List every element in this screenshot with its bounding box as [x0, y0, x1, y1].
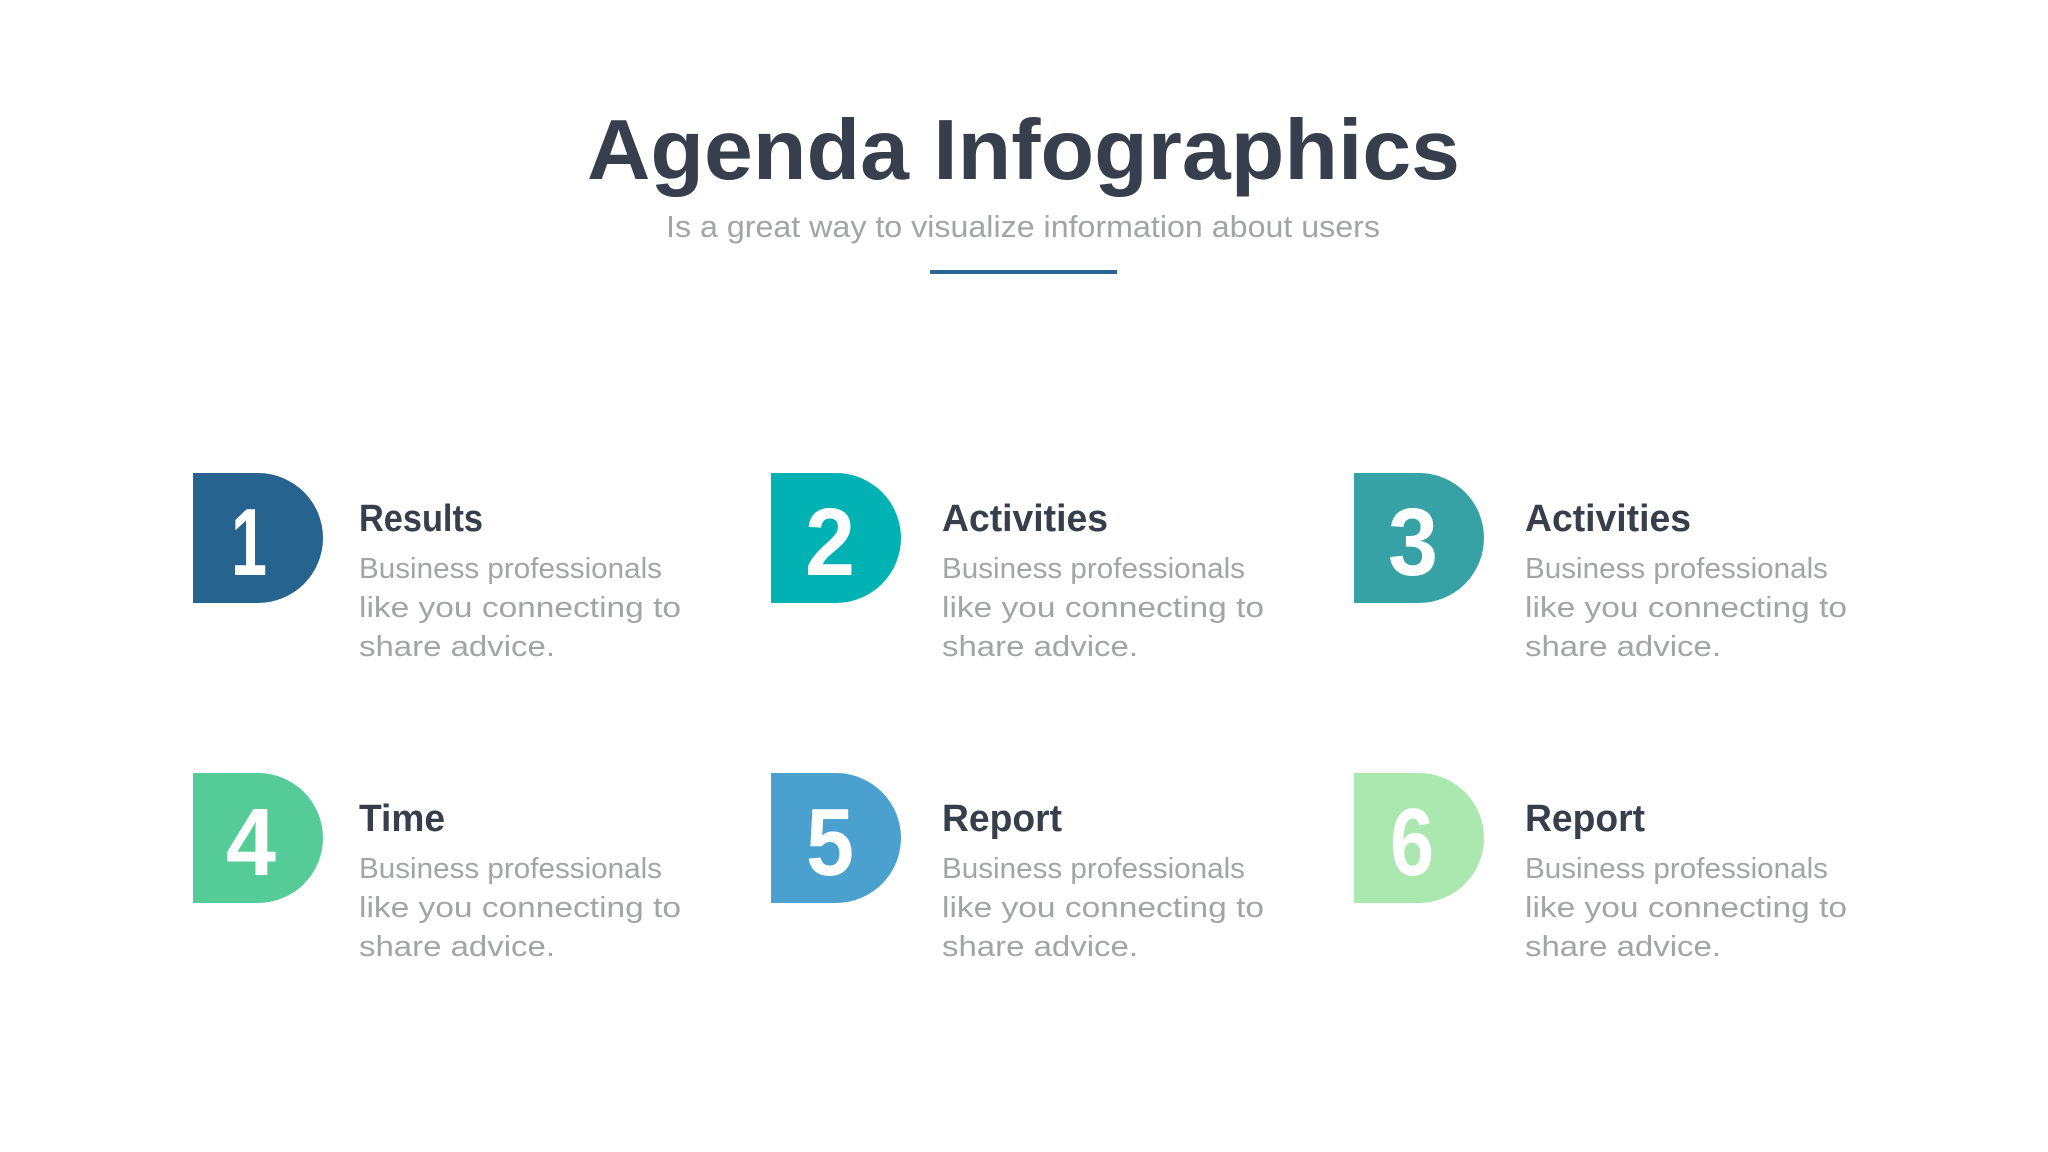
badge 6 — [1354, 773, 1484, 903]
description 2: share advice. — [942, 631, 1138, 663]
description 1: Business professionals — [359, 553, 662, 585]
badge 1: 1 — [231, 489, 267, 596]
badge 4 — [193, 773, 323, 903]
heading: Report: Report — [1525, 798, 1645, 840]
description 3: Business professionals — [1525, 553, 1828, 585]
agenda item 6: Report — [1354, 773, 1847, 963]
description 2: Business professionals — [942, 553, 1245, 585]
description 2: like you connecting to — [942, 592, 1264, 624]
badge 2: 2 — [805, 489, 855, 596]
badge 3: 3 — [1388, 489, 1438, 596]
heading: Activities: Activities — [1525, 498, 1691, 540]
title underline — [930, 270, 1117, 274]
heading: Activities: Activities — [942, 498, 1108, 540]
subtitle: Is a great way to visualize information about users — [666, 209, 1380, 244]
badge 3 — [1354, 473, 1484, 603]
agenda item 3: Activities — [1354, 473, 1847, 663]
description 3: like you connecting to — [1525, 592, 1847, 624]
badge 1 — [193, 473, 323, 603]
description 5: share advice. — [942, 931, 1138, 963]
badge 4: 4 — [226, 789, 276, 896]
heading: Report: Report — [942, 798, 1062, 840]
title: Agenda Infographics — [587, 103, 1460, 198]
badge 5: 5 — [806, 789, 854, 896]
heading: Results: Results — [359, 498, 483, 540]
badge 2 — [771, 473, 901, 603]
agenda item 1: Results — [193, 473, 681, 663]
agenda item 4: Time — [193, 773, 681, 963]
description 6: share advice. — [1525, 931, 1721, 963]
agenda item 2: Activities — [771, 473, 1264, 663]
description 4: like you connecting to — [359, 892, 681, 924]
badge 6: 6 — [1390, 789, 1434, 896]
description 6: Business professionals — [1525, 853, 1828, 885]
description 5: Business professionals — [942, 853, 1245, 885]
description 3: share advice. — [1525, 631, 1721, 663]
description 1: like you connecting to — [359, 592, 681, 624]
description 6: like you connecting to — [1525, 892, 1847, 924]
description 4: share advice. — [359, 931, 555, 963]
description 5: like you connecting to — [942, 892, 1264, 924]
badge 5 — [771, 773, 901, 903]
description 4: Business professionals — [359, 853, 662, 885]
description 1: share advice. — [359, 631, 555, 663]
heading: Time: Time — [359, 798, 445, 840]
agenda item 5: Report — [771, 773, 1264, 963]
